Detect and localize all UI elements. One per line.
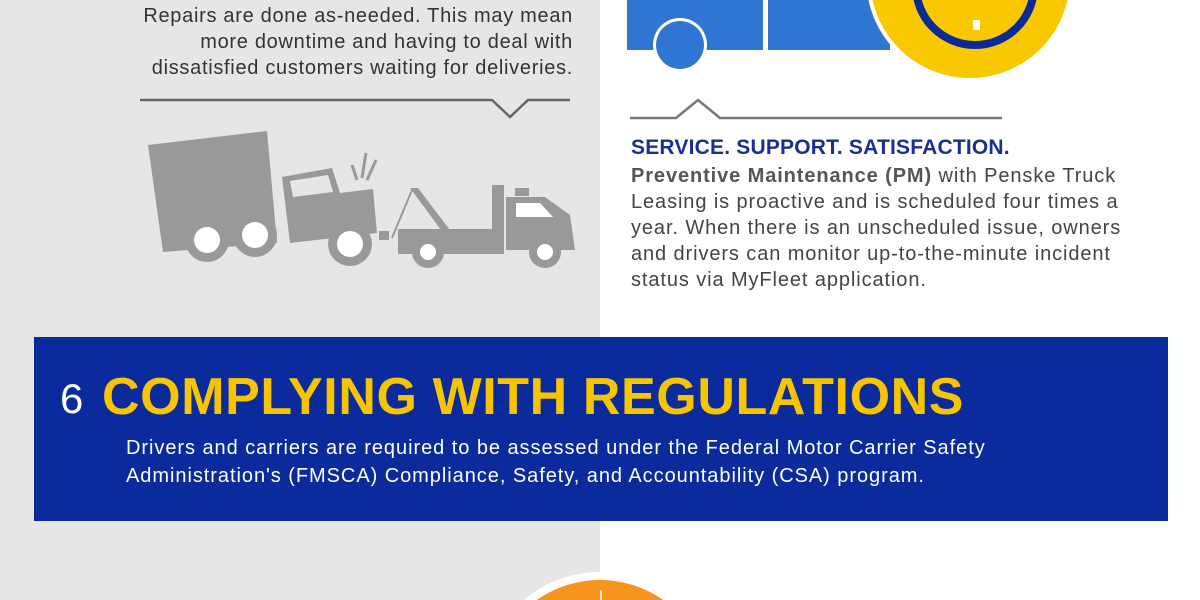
banner text	[126, 437, 986, 487]
panel: complying with regulations banner	[34, 337, 1168, 521]
right text block: year. When there is an unscheduled issue, owners	[631, 217, 1121, 239]
left text block: dissatisfied customers waiting for deliveries.	[152, 57, 573, 79]
left callout line	[140, 98, 1002, 120]
icon: orange circle	[524, 572, 664, 600]
left gray panel background	[0, 0, 600, 600]
heading: COMPLYING WITH REGULATIONS	[102, 368, 964, 426]
icon: broken truck being towed	[148, 131, 575, 268]
right text block: status via MyFleet application.	[631, 269, 927, 291]
banner text: Administration's (FMSCA) Compliance, Safety, and Accountability (CSA) program.	[126, 465, 925, 487]
right text block: Leasing is proactive and is scheduled four times a	[631, 191, 1118, 213]
right text block: and drivers can monitor up-to-the-minute incident	[631, 243, 1111, 265]
icon: blue truck with yellow clock	[627, 0, 1068, 78]
left text block: Repairs are done as-needed. This may mean	[143, 5, 573, 27]
right text block	[631, 165, 1121, 291]
right heading: SERVICE. SUPPORT. SATISFACTION.	[631, 136, 1010, 159]
left text block: more downtime and having to deal with	[200, 31, 573, 53]
banner text: Drivers and carriers are required to be assessed under the Federal Motor Carrier Safety	[126, 437, 986, 459]
right text block: Preventive Maintenance (PM) with Penske Truck	[631, 165, 1116, 187]
heading number: 6	[60, 375, 83, 422]
left text block	[143, 5, 573, 79]
